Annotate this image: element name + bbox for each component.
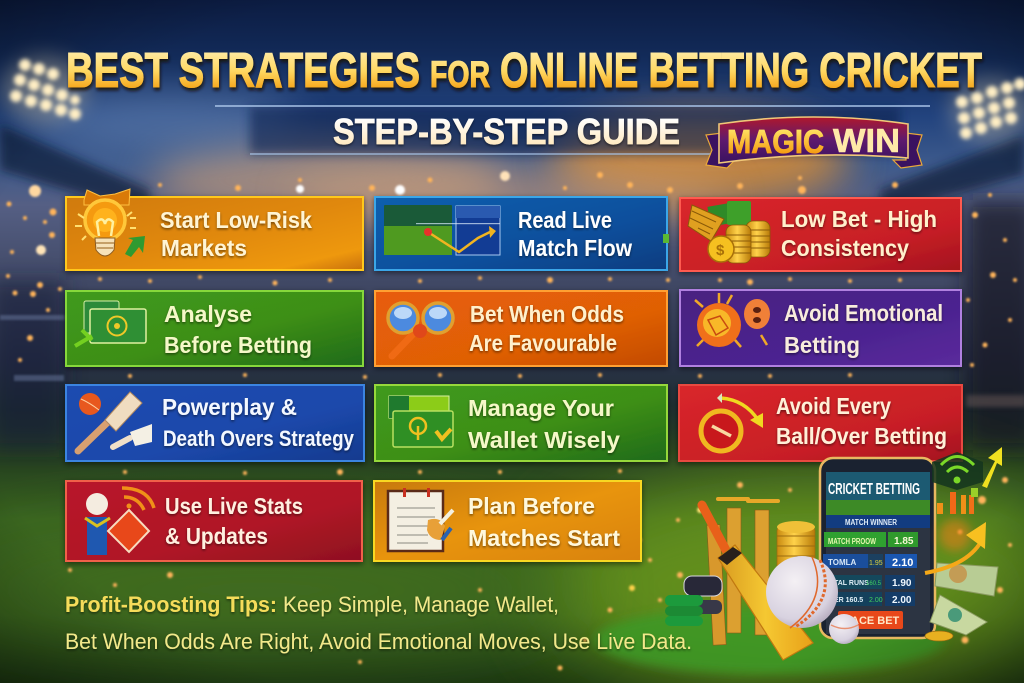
card text: & Updates [165,523,268,549]
subtitle band: step-by-step guide: STEP-BY-STEP GUIDE [333,111,680,152]
phone: 1.85 [894,536,914,547]
phone: 2.00 [869,597,883,604]
card text [781,206,937,261]
profit-boosting tips: Keep Simple, Manage Wallet, [283,592,559,617]
card: Use Live Stats and Updates [66,481,362,561]
phone [820,458,935,638]
wifi icon [932,452,983,490]
phone: MATCH PROOW [828,537,876,546]
phone: 2.10 [892,557,913,569]
phone: ACE BET [851,615,900,627]
icon: bat, ball, shuttle [78,392,152,451]
wickets and bails [707,497,780,645]
icon: burst and mask [695,293,770,347]
card text: Betting [784,332,860,358]
profit-boosting tips [65,592,692,654]
logo badge: Magic Win: WIN [833,122,900,159]
card text [468,493,620,551]
title: FOR [430,54,490,95]
card: Analyse Before Betting [66,291,363,366]
card text: Before Betting [164,332,312,358]
card text [776,393,947,449]
illustration: cricket gear [665,447,1002,660]
icon: coins and cash [688,201,770,263]
small cricket ball [829,614,859,644]
icon: wallet with check [389,396,453,447]
mini bar chart [937,488,978,514]
gold coin [925,631,953,641]
card: Read Live Match Flow [375,197,669,270]
subtitle band: step-by-step guide [215,105,930,155]
card text: Consistency [781,235,909,261]
card text: Analyse [164,301,252,327]
profit-boosting tips: Profit-Boosting Tips: [65,592,277,617]
phone: TAL RUNS [834,580,869,587]
card text [160,207,312,261]
phone: CRICKET BETTING [828,481,920,498]
icon: player, signal, diamond [85,488,154,555]
card: Powerplay and Death Overs Strategy [66,385,364,461]
profit-boosting tips: Bet When Odds Are Right, Avoid Emotional Moves, Use Live Data. [65,629,692,654]
icon: folder with target [75,301,146,346]
phone: ER 160.5 [834,597,863,604]
card text: Use Live Stats [165,493,303,519]
card text: Start Low-Risk [160,207,312,233]
card text [468,395,620,453]
phone: MATCH WINNER [845,518,897,527]
card text: Bet When Odds [470,301,624,327]
card: Bet When Odds Are Favourable [375,291,667,366]
card text [162,394,355,451]
card text: Avoid Every [776,393,891,419]
card: Avoid Every Ball/Over Betting [679,385,962,461]
poker chips [665,576,722,626]
card text [784,300,943,358]
phone: 1.90 [892,578,912,589]
logo badge: Magic Win [706,117,922,168]
large cricket ball [766,556,838,628]
card text: Matches Start [468,525,620,551]
icon: coins and cash: $ [716,242,725,259]
icon: live chart over pitch [384,205,500,255]
card text: Read Live [518,207,612,233]
card text [518,207,632,261]
logo badge: Magic Win: MAGIC [727,123,824,160]
card text: Ball/Over Betting [776,423,947,449]
card text [165,493,303,549]
card: Avoid Emotional Betting [680,290,961,366]
icon: timer with arrow [701,393,763,451]
card text: Markets [161,235,247,261]
card text: Are Favourable [469,330,617,356]
card text: Death Overs Strategy [163,426,355,451]
icon: light bulb [75,189,145,257]
card text: Wallet Wisely [468,427,620,453]
icon: binocular magnifier [388,303,453,356]
title [66,44,982,98]
glowing orange arrow [925,519,986,573]
card text [469,301,624,356]
card text: Match Flow [518,235,632,261]
floodlights right [950,78,1024,142]
cricket bat [702,505,813,660]
card: Plan Before Matches Start [374,481,641,561]
stack of gold coins [777,521,815,576]
card text: Powerplay & [162,394,297,420]
banknotes [930,563,998,635]
phone: TOMLA [828,558,857,567]
card text: Plan Before [468,493,595,519]
floodlights left [3,56,87,124]
phone: 2.00 [892,595,912,606]
card text: Avoid Emotional [784,300,943,326]
card: Start Low-Risk Markets [66,189,363,270]
card: Low Bet - High Consistency [680,198,961,271]
yellow trend arrow [982,447,1002,488]
card text: Low Bet - High [781,206,937,232]
title: BEST STRATEGIES [66,44,420,98]
icon: checklist notepad [388,488,453,551]
phone: 160.5 [866,581,882,587]
card: Manage Your Wallet Wisely [375,385,667,461]
card text: Manage Your [468,395,614,421]
phone: 1.95 [869,560,883,567]
card text [164,301,312,358]
